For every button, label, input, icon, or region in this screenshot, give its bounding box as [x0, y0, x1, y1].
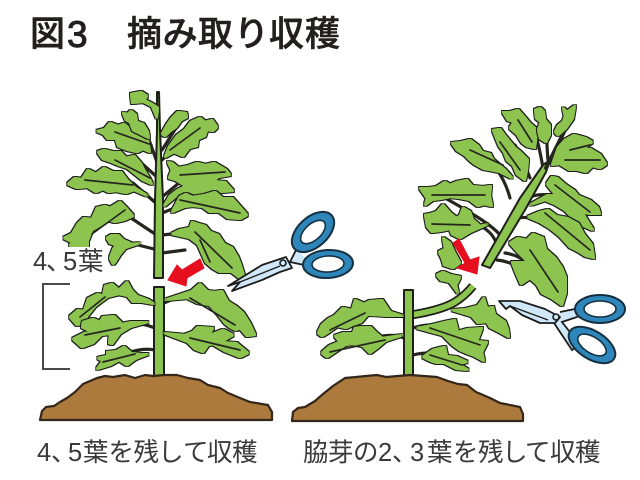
right soil mound [292, 375, 523, 421]
leaf left third [68, 168, 148, 196]
upper stem [154, 92, 163, 278]
leaf bottom right [423, 347, 468, 370]
leaf upper right [165, 118, 217, 157]
leaf c [503, 110, 537, 148]
left soil mound [40, 375, 272, 420]
branches [122, 112, 195, 253]
leaf veins [330, 313, 480, 365]
leaf j [425, 205, 488, 238]
leaf mid right [164, 327, 248, 357]
left arrow [168, 259, 204, 286]
leaf veins [432, 120, 600, 292]
leaf lower right [172, 222, 244, 278]
title: 図 [30, 15, 65, 54]
lower stem [154, 287, 164, 376]
leaf left second [98, 150, 152, 184]
main stem [404, 290, 413, 376]
bracket [43, 284, 70, 369]
leaf bottom left [97, 347, 148, 369]
leaf lower left [64, 202, 133, 248]
right plant: cut shoot [420, 106, 606, 305]
right caption: 脇芽の2、3葉を残して収穫 [303, 439, 601, 467]
branches [445, 130, 595, 295]
label: 4,5 leaves: 4、5葉 [33, 248, 104, 276]
leaf veins [85, 128, 240, 268]
title: 摘み取り収穫 [127, 15, 340, 54]
tip leaf [131, 92, 158, 118]
side shoot outline [411, 286, 473, 315]
leaf a [452, 140, 512, 178]
blade edge [240, 266, 280, 282]
leaf g [530, 177, 600, 230]
small leaf base on shoot [437, 272, 460, 293]
left plant: upper cut part [64, 92, 247, 278]
leaf i [420, 180, 492, 206]
leaf top right [165, 284, 255, 336]
blades [228, 257, 292, 291]
leaf lower small [107, 235, 140, 264]
blades [499, 301, 560, 323]
left scissors [228, 204, 354, 291]
left plant: lower part [70, 282, 255, 376]
branches [100, 295, 215, 354]
leaf upper left [97, 123, 150, 152]
title [30, 14, 340, 55]
leaf small upper [123, 111, 149, 138]
branches [360, 312, 460, 356]
leaf h [528, 210, 594, 258]
upper stem [482, 160, 550, 268]
leaf d [535, 108, 550, 142]
right scissors [499, 295, 625, 371]
right plant: lower part [318, 238, 509, 376]
side leaf [452, 298, 509, 337]
blade edge [510, 306, 548, 320]
leaf mid left [73, 316, 148, 347]
leaf top left [318, 300, 403, 336]
leaf e [555, 106, 575, 135]
right arrow [453, 239, 479, 274]
leaf f [552, 135, 606, 172]
small leaf on shoot [439, 238, 460, 268]
handles [552, 308, 580, 350]
leaf right third [172, 192, 247, 219]
leaf top right small [162, 112, 187, 136]
leaf k [510, 234, 566, 305]
leaf mid right [417, 320, 487, 361]
leaf veins [80, 297, 240, 362]
leaf top left [70, 282, 154, 325]
side shoot fill [411, 286, 473, 315]
leaf b [493, 129, 528, 180]
title: 3 [67, 14, 88, 55]
leaf right second [164, 162, 233, 206]
stem tip [546, 130, 565, 168]
leaf mid left [322, 327, 403, 357]
handles [290, 250, 318, 268]
left caption: 4、5葉を残して収穫 [37, 439, 258, 467]
